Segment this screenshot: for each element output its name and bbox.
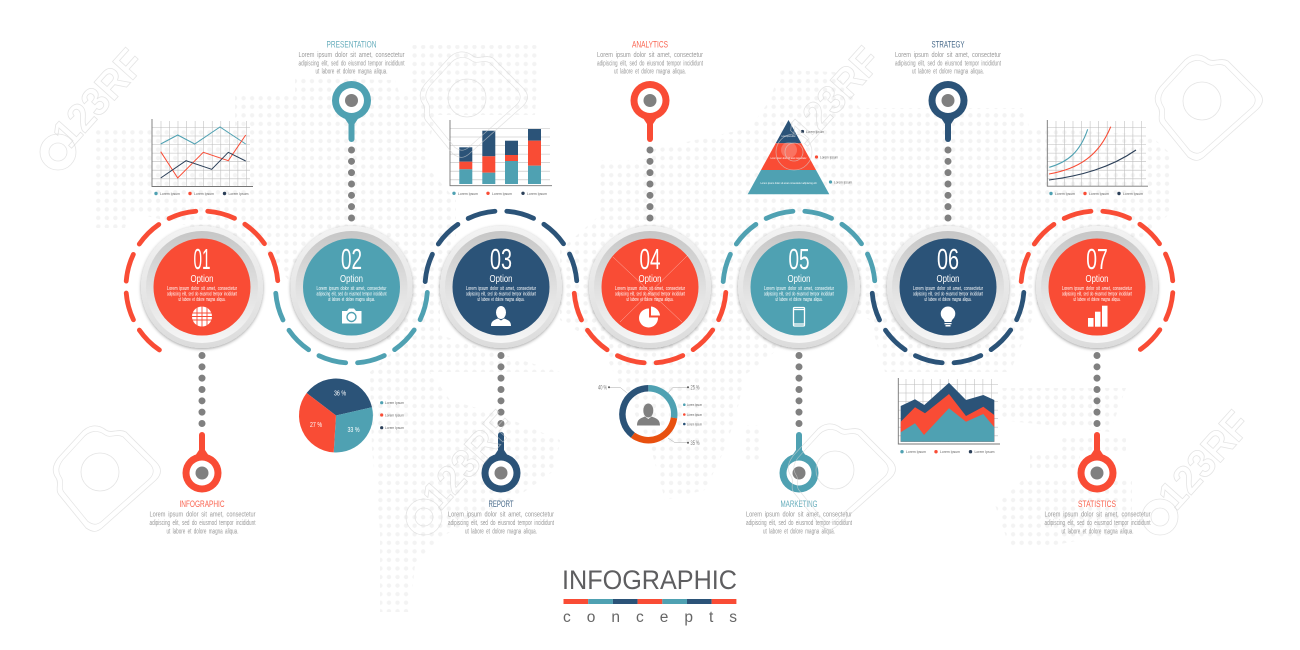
dashed ring 2 bbox=[270, 205, 433, 369]
legend bbox=[154, 191, 249, 196]
stock watermark outlines: 123RF bbox=[1150, 403, 1260, 518]
connector dots 3 bbox=[498, 356, 504, 424]
dashed ring 5 bbox=[717, 205, 881, 369]
step 2 presentation: pin, connector, ring, circle bbox=[270, 40, 433, 369]
description 1: Lorem ipsum dolor sit amet, consectetur bbox=[150, 512, 256, 518]
description 7: Lorem ipsum dolor sit amet, consectetur bbox=[1044, 512, 1151, 518]
description 7 bbox=[1044, 512, 1151, 536]
label statistics: STATISTICS bbox=[1078, 499, 1116, 510]
description 7: adipiscing elit, sed do eiusmod tempor incididunt bbox=[1044, 520, 1151, 527]
circle 6: ut labore et dolore magna aliqua. bbox=[924, 297, 972, 303]
dashed ring 3 bbox=[419, 205, 583, 369]
donut chart: 25 % bbox=[690, 386, 700, 392]
legend bbox=[1049, 191, 1144, 196]
legend: Lorem Ipsum bbox=[492, 191, 513, 196]
circle 7 bbox=[1036, 226, 1158, 348]
description 3: ut labore et dolore magna aliqua. bbox=[465, 528, 537, 536]
legend: Lorem Ipsum bbox=[834, 180, 853, 184]
pyramid chart: Lorem ipsum dolor bbox=[782, 134, 796, 138]
circle 7: adipiscing elit, sed do eiusmod tempor incididunt bbox=[1062, 292, 1132, 298]
dashed ring 4 bbox=[568, 205, 732, 369]
legend: Lorem Ipsum bbox=[385, 400, 405, 405]
legend: Lorem Ipsum bbox=[806, 129, 825, 134]
circle 5: Option bbox=[788, 274, 810, 285]
label infographic: INFOGRAPHIC bbox=[180, 499, 225, 510]
pin 6 bbox=[928, 81, 968, 142]
circle 3 bbox=[440, 226, 562, 348]
label strategy: STRATEGY bbox=[932, 40, 965, 50]
pyramid chart: Lorem ipsum dolor sit amet consectetur adipiscing elit bbox=[760, 181, 817, 185]
dashed ring 1 bbox=[96, 181, 308, 393]
description 1: ut labore et dolore magna aliqua. bbox=[166, 528, 239, 536]
stock watermark outlines: 123RF bbox=[414, 403, 524, 518]
legend bbox=[380, 400, 405, 430]
circle 4 bbox=[589, 226, 711, 348]
circle 7: Option bbox=[1086, 274, 1108, 285]
curve chart bbox=[1047, 120, 1148, 196]
connector dots 4 bbox=[646, 150, 654, 219]
connector dots 2 bbox=[348, 150, 355, 219]
description 6 bbox=[895, 52, 1002, 76]
stacked bar chart bbox=[450, 120, 552, 196]
pyramid chart: Lorem ipsum dolor sit amet consectetur bbox=[770, 156, 807, 160]
circle 1: 01 bbox=[194, 244, 210, 276]
legend bbox=[900, 449, 995, 454]
legend bbox=[683, 402, 702, 426]
title: INFOGRAPHIC bbox=[562, 565, 737, 595]
description 1 bbox=[150, 512, 256, 536]
description 2: adipiscing elit, sed do eiusmod tempor incididunt bbox=[298, 60, 405, 68]
icon: globe bbox=[192, 306, 212, 326]
connector dots 6 bbox=[944, 150, 952, 219]
circle 7: 07 bbox=[1086, 244, 1108, 276]
pin 5 bbox=[780, 432, 818, 492]
icon: light bulb bbox=[941, 306, 955, 326]
circle 7: ut labore et dolore magna aliqua. bbox=[1074, 297, 1120, 303]
circle 1 bbox=[141, 226, 263, 348]
circle 6 bbox=[887, 226, 1009, 348]
legend: Lorem Ipsum bbox=[160, 191, 181, 196]
legend: Lorem Ipsum bbox=[687, 412, 702, 417]
step 5 marketing: pin, connector, ring, circle bbox=[717, 205, 881, 536]
icon: person bbox=[637, 404, 660, 426]
dashed ring 7 bbox=[1015, 205, 1179, 369]
connector dots 5 bbox=[796, 356, 802, 424]
step 7 statistics: pin, connector, ring, circle bbox=[1015, 205, 1179, 536]
circle 6: 06 bbox=[937, 244, 959, 276]
pin 7 bbox=[1078, 432, 1116, 492]
pin 3 bbox=[482, 432, 520, 492]
legend: Lorem Ipsum bbox=[1123, 191, 1144, 196]
circle 2: 02 bbox=[341, 244, 362, 276]
description 3: adipiscing elit, sed do eiusmod tempor incididunt bbox=[448, 520, 554, 527]
stock watermark outlines: 123RF bbox=[780, 39, 890, 154]
step 6 strategy: pin, connector, ring, circle bbox=[866, 40, 1030, 369]
icon: camera bbox=[342, 308, 362, 324]
connector dots 7 bbox=[1094, 356, 1100, 424]
legend: Lorem Ipsum bbox=[940, 449, 961, 454]
legend: Lorem Ipsum bbox=[1055, 191, 1076, 196]
circle 4: 04 bbox=[640, 244, 660, 276]
legend bbox=[452, 191, 548, 196]
legend: Lorem Ipsum bbox=[527, 191, 548, 196]
description 5 bbox=[746, 512, 853, 536]
description 2: ut labore et dolore magna aliqua. bbox=[316, 68, 388, 76]
circle 6: Lorem ipsum dolor sit amet, consectetur bbox=[913, 286, 983, 292]
icon: phone bbox=[793, 308, 805, 326]
donut chart: 40 % bbox=[598, 386, 607, 392]
legend: Lorem Ipsum bbox=[1089, 191, 1110, 196]
legend bbox=[801, 129, 853, 184]
circle 3: ut labore et dolore magna aliqua. bbox=[478, 297, 524, 303]
circle 2: Lorem ipsum dolor sit amet, consectetur bbox=[316, 286, 387, 292]
circle 3: Option bbox=[490, 274, 512, 285]
description 4: Lorem ipsum dolor sit amet, consectetur bbox=[597, 52, 704, 59]
pie chart: 33 % bbox=[348, 427, 360, 434]
line chart bbox=[152, 119, 253, 196]
circle 3: Lorem ipsum dolor sit amet, consectetur bbox=[466, 286, 536, 292]
legend: Lorem Ipsum bbox=[906, 449, 927, 454]
pyramid chart bbox=[748, 120, 853, 194]
legend: Lorem Ipsum bbox=[385, 412, 405, 418]
circle 5 bbox=[738, 226, 860, 348]
description 5: Lorem ipsum dolor sit amet, consectetur bbox=[746, 512, 853, 518]
circle 7: Lorem ipsum dolor sit amet, consectetur bbox=[1062, 286, 1132, 292]
icon: person bbox=[491, 306, 511, 326]
pin 2 bbox=[332, 81, 371, 142]
description 2: Lorem ipsum dolor sit amet, consectetur bbox=[298, 52, 405, 59]
circle 4: ut labore et dolore magna aliqua. bbox=[626, 297, 674, 303]
circle 2: Option bbox=[340, 274, 363, 285]
circle 2 bbox=[290, 226, 412, 348]
description 4: adipiscing elit, sed do eiusmod tempor incididunt bbox=[597, 60, 703, 68]
description 3: Lorem ipsum dolor sit amet, consectetur bbox=[448, 512, 555, 518]
label analytics: ANALYTICS bbox=[632, 40, 668, 50]
circle 4: adipiscing elit, sed do eiusmod tempor incididunt bbox=[615, 292, 685, 298]
step 1 infographic: pin, connector, ring, circle bbox=[96, 181, 308, 536]
circle 3: adipiscing elit, sed do eiusmod tempor incididunt bbox=[466, 292, 536, 298]
description 5: ut labore et dolore magna aliqua. bbox=[763, 528, 835, 536]
description 6: adipiscing elit, sed do eiusmod tempor incididunt bbox=[895, 60, 1001, 68]
title block bbox=[562, 565, 737, 626]
legend: Lorem Ipsum bbox=[458, 191, 479, 196]
circle 2: ut labore et dolore magna aliqua. bbox=[328, 297, 375, 303]
connector dots 1 bbox=[198, 356, 206, 424]
step 4 analytics: pin, connector, ring, circle bbox=[568, 40, 732, 369]
description 5: adipiscing elit, sed do eiusmod tempor incididunt bbox=[746, 520, 852, 527]
description 6: ut labore et dolore magna aliqua. bbox=[912, 68, 984, 76]
circle 4: Lorem ipsum dolor sit amet, consectetur bbox=[615, 286, 685, 292]
legend: Lorem Ipsum bbox=[385, 425, 405, 430]
description 6: Lorem ipsum dolor sit amet, consectetur bbox=[895, 52, 1002, 59]
pin 1 bbox=[182, 432, 222, 492]
circle 4: Option bbox=[638, 274, 662, 285]
donut chart bbox=[598, 386, 702, 447]
icon: pie chart bbox=[639, 306, 660, 327]
stock watermark outlines: 123RF bbox=[44, 41, 154, 156]
description 4: ut labore et dolore magna aliqua. bbox=[614, 68, 686, 76]
area chart bbox=[898, 378, 1000, 454]
legend: Lorem Ipsum bbox=[194, 191, 215, 196]
circle 1: ut labore et dolore magna aliqua. bbox=[178, 297, 226, 303]
circle 1: adipiscing elit, sed do eiusmod tempor incididunt bbox=[167, 292, 237, 298]
icon: bar chart bbox=[1088, 306, 1108, 327]
circle 2: adipiscing elit, sed do eiusmod tempor incididunt bbox=[316, 292, 387, 298]
stock watermark outlines bbox=[40, 39, 1262, 535]
donut chart: 35 % bbox=[690, 441, 700, 447]
circle 1: Option bbox=[190, 274, 214, 285]
step 3 report: pin, connector, ring, circle bbox=[419, 205, 583, 536]
subtitle: concepts bbox=[563, 609, 737, 626]
dashed ring 6 bbox=[866, 205, 1030, 369]
pie chart: 27 % bbox=[310, 422, 322, 429]
pin 4 bbox=[630, 81, 670, 142]
label report: REPORT bbox=[488, 499, 514, 510]
pie chart bbox=[299, 379, 405, 452]
circle 1: Lorem ipsum dolor sit amet, consectetur bbox=[167, 286, 237, 292]
legend: Lorem Ipsum bbox=[687, 422, 702, 426]
description 3 bbox=[448, 512, 555, 536]
description 7: ut labore et dolore magna aliqua. bbox=[1062, 528, 1134, 536]
description 2 bbox=[298, 52, 405, 76]
description 1: adipiscing elit, sed do eiusmod tempor incididunt bbox=[150, 520, 256, 527]
circle 3: 03 bbox=[490, 244, 512, 276]
legend: Lorem Ipsum bbox=[820, 154, 839, 160]
tricolour bar bbox=[564, 599, 736, 604]
circle 6: adipiscing elit, sed do eiusmod tempor incididunt bbox=[913, 292, 983, 298]
legend: Lorem Ipsum bbox=[228, 191, 249, 196]
circle 5: Lorem ipsum dolor sit amet, consectetur bbox=[764, 286, 834, 292]
circle 5: ut labore et dolore magna aliqua. bbox=[776, 297, 822, 303]
pie chart: 36 % bbox=[334, 390, 346, 398]
legend: Lorem Ipsum bbox=[687, 402, 702, 407]
label presentation: PRESENTATION bbox=[326, 40, 377, 50]
circle 6: Option bbox=[936, 274, 960, 285]
dotted world map background bbox=[92, 45, 1172, 612]
circle 5: adipiscing elit, sed do eiusmod tempor incididunt bbox=[764, 292, 834, 298]
label marketing: MARKETING bbox=[780, 499, 818, 510]
circle 5: 05 bbox=[788, 244, 810, 276]
description 4 bbox=[597, 52, 704, 76]
legend: Lorem Ipsum bbox=[974, 449, 995, 454]
